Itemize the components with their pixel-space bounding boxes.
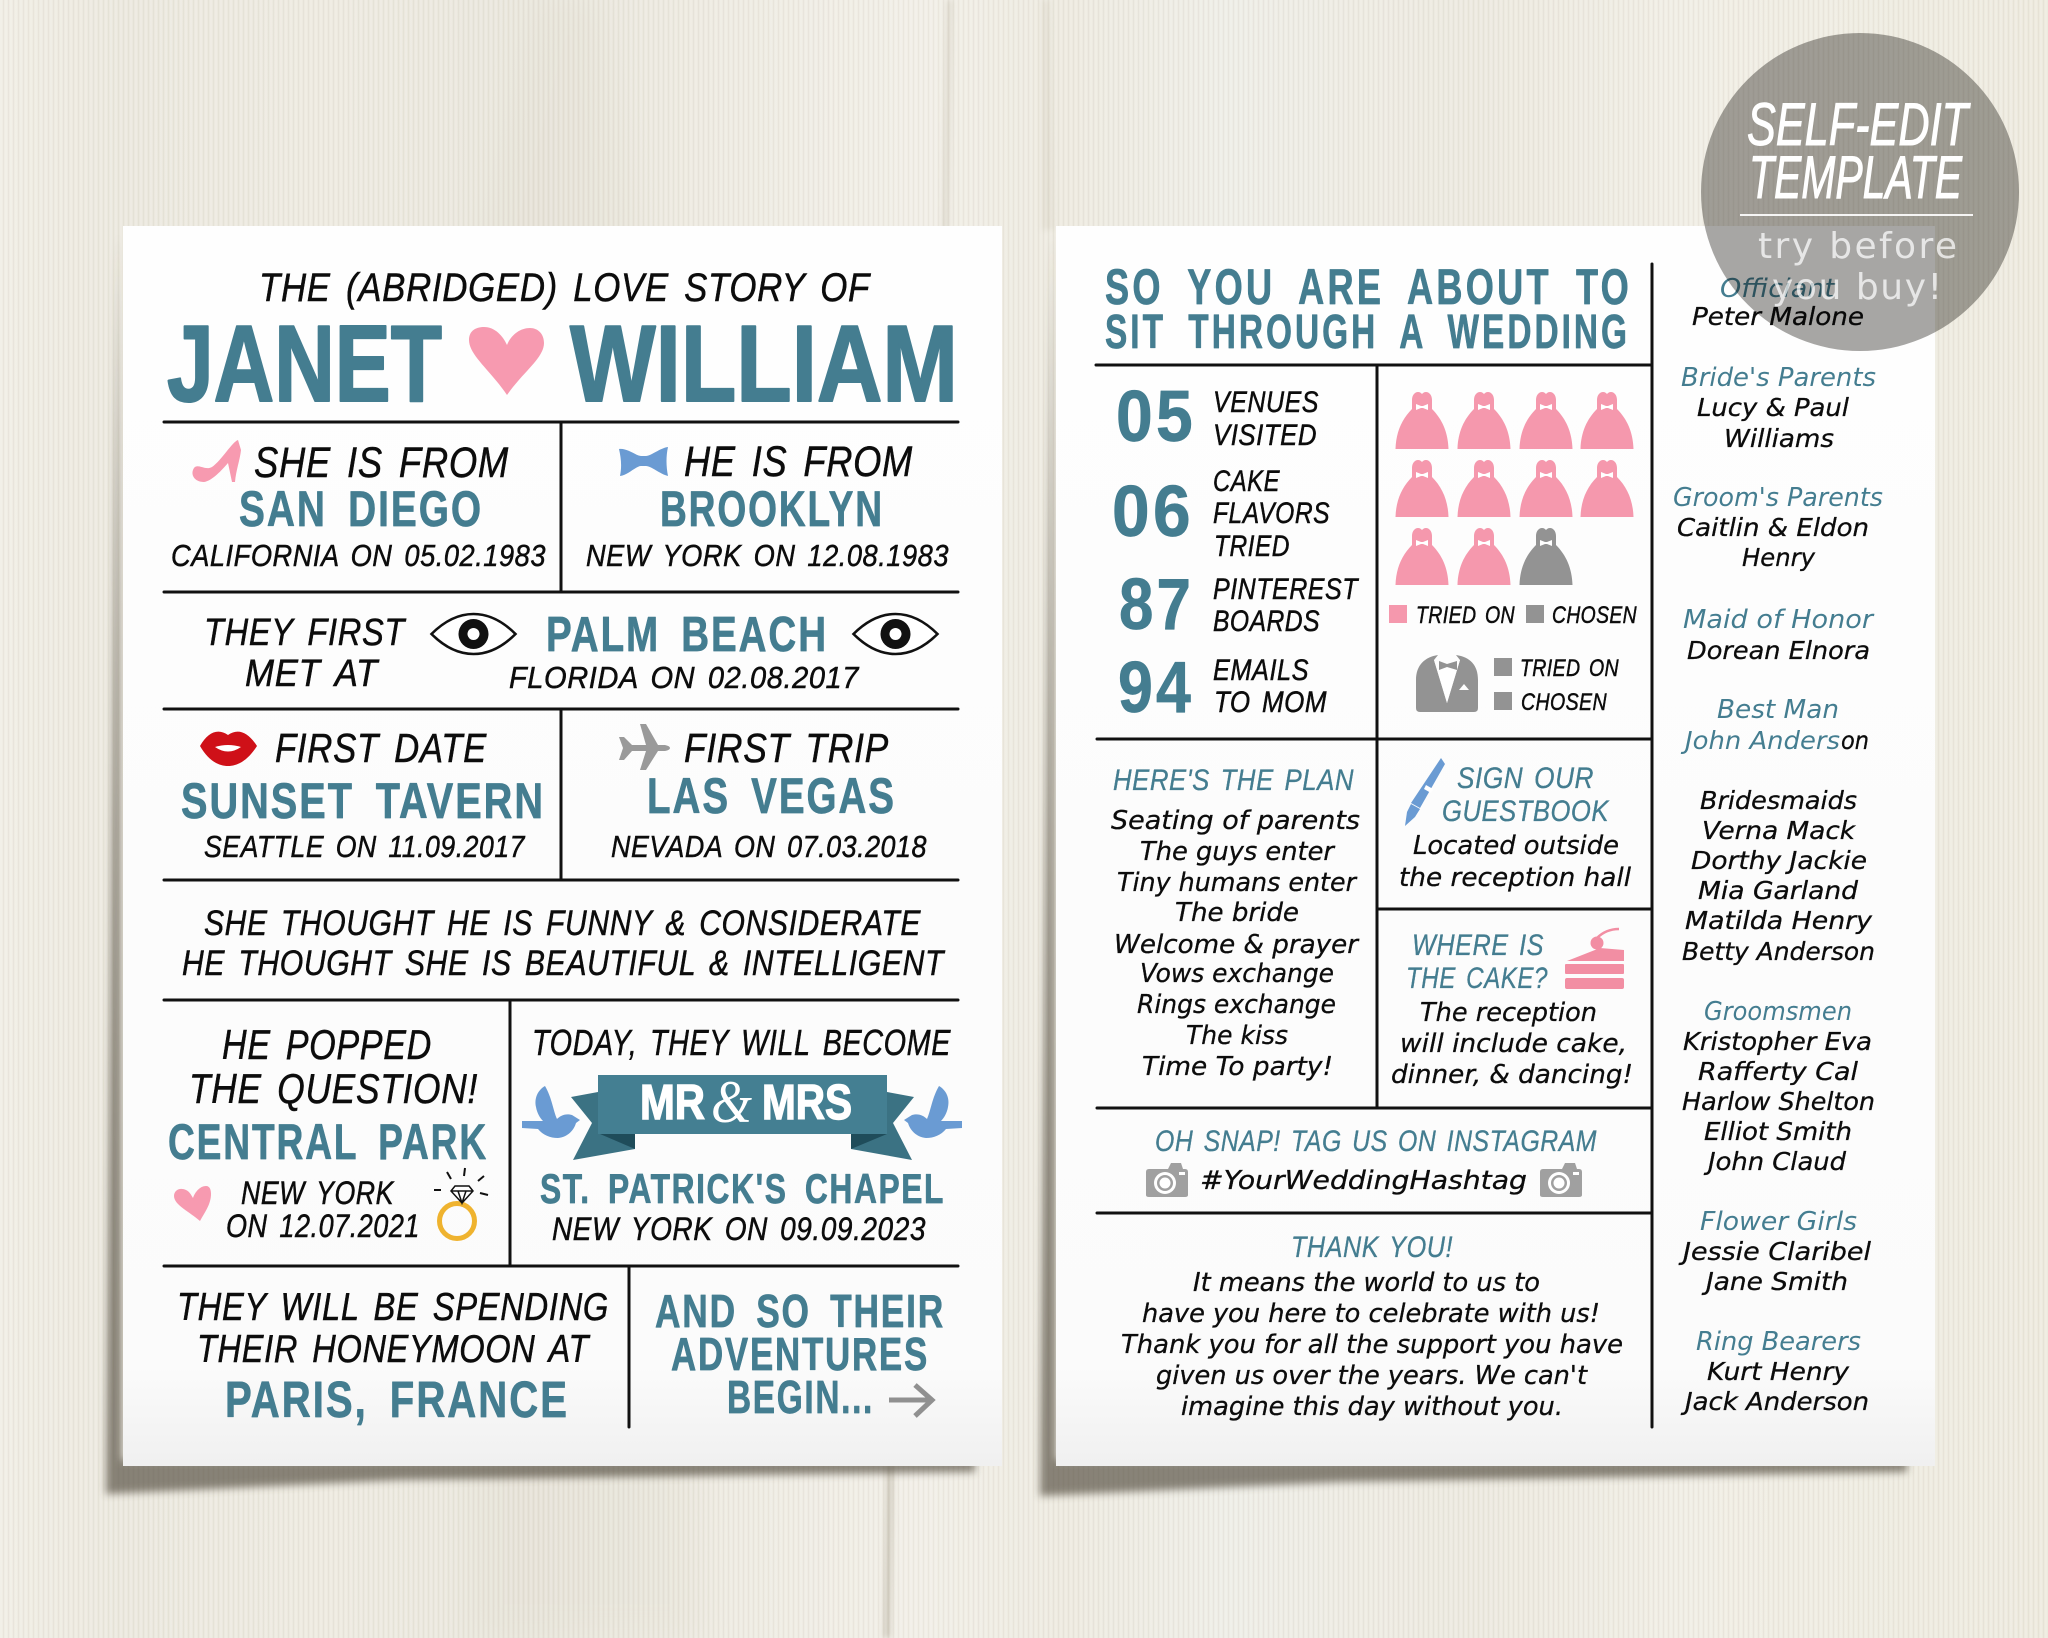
panel: honeymoon: PARIS, FRANCE	[225, 1371, 569, 1428]
panel: thank you: THANK YOU!	[1291, 1231, 1453, 1264]
icon: camera right	[1540, 1163, 1582, 1197]
stat: emails	[1118, 648, 1327, 728]
legend: tuxedo	[1494, 655, 1619, 716]
icon: bow tie	[619, 447, 668, 476]
flower girls: Jessie Claribel	[1678, 1237, 1871, 1266]
heading: SO YOU ARE ABOUT TO	[1105, 259, 1632, 315]
stats: numbers	[1112, 377, 1360, 728]
officiant: Peter Malone	[1692, 302, 1864, 331]
text: proposal date: ON 12.07.2021	[226, 1208, 420, 1244]
icon: high heel	[192, 440, 241, 482]
best man: on	[1841, 726, 1869, 755]
panel: today they become	[522, 1022, 962, 1247]
best man	[1680, 695, 1869, 755]
stat: cake flavors: 06	[1112, 472, 1194, 552]
badge: self-edit template	[1701, 33, 2019, 351]
text: ampersand: &	[711, 1069, 752, 1135]
groomsmen: John Claud	[1703, 1147, 1846, 1176]
panel: where is the cake	[1391, 929, 1633, 1090]
panel: where is the cake: dinner, & dancing!	[1391, 1060, 1633, 1090]
text: San Diego: SAN DIEGO	[239, 481, 483, 537]
text block: what they thought: SHE THOUGHT HE IS FUNNY & CONSIDERATE	[204, 904, 921, 943]
text: California date: CALIFORNIA ON 05.02.1983	[171, 538, 546, 573]
panel: adventures begin: BEGIN...	[727, 1371, 874, 1423]
ring bearers: Jack Anderson	[1680, 1387, 1869, 1416]
text: he is from: HE IS FROM	[684, 438, 913, 486]
groom's parents	[1673, 483, 1883, 572]
text: Seattle date: SEATTLE ON 11.09.2017	[204, 829, 526, 864]
name: Janet: JANET	[167, 303, 442, 425]
card shadows	[106, 230, 1907, 1496]
arrow	[889, 1385, 932, 1416]
stat: emails: TO MOM	[1214, 686, 1327, 719]
title line: THE (ABRIDGED) LOVE STORY OF	[259, 266, 872, 310]
legend: tuxedo: TRIED ON	[1520, 655, 1619, 682]
maid of honor: Dorean Elnora	[1687, 636, 1870, 665]
text: first date: FIRST DATE	[275, 725, 487, 771]
panel: he is from	[586, 438, 949, 573]
card: love story (left)	[123, 226, 1002, 1466]
text: they first: THEY FIRST	[204, 612, 407, 654]
panel: honeymoon: THEIR HONEYMOON AT	[197, 1328, 591, 1371]
text: first trip: FIRST TRIP	[684, 725, 889, 771]
icon: cake slice	[1565, 929, 1624, 989]
icon: tuxedo	[1416, 655, 1478, 712]
panel: honeymoon	[177, 1286, 609, 1428]
panel: here's the plan: Vows exchange	[1140, 959, 1334, 989]
stat: pinterest boards: BOARDS	[1213, 605, 1320, 638]
panel: sign our guestbook: the reception hall	[1399, 863, 1632, 893]
panel: here's the plan: The kiss	[1186, 1021, 1288, 1051]
maid of honor: Maid of Honor	[1683, 605, 1875, 635]
ring bearers: Kurt Henry	[1707, 1357, 1850, 1386]
icon: right dove	[904, 1086, 962, 1138]
icon: small heart	[174, 1186, 211, 1221]
groom's parents: Caitlin & Eldon	[1677, 513, 1869, 542]
stat: emails: EMAILS	[1213, 654, 1309, 687]
icon: diamond ring	[434, 1168, 488, 1238]
panel: where is the cake: WHERE IS	[1412, 929, 1544, 962]
panel: sign our guestbook: SIGN OUR	[1457, 762, 1594, 795]
panel: the proposal	[168, 1021, 488, 1244]
pictogram chart: dresses	[1396, 392, 1634, 585]
card: wedding program (right)	[1056, 226, 1935, 1466]
panel: here's the plan: Rings exchange	[1137, 990, 1336, 1020]
officiant: Officiant	[1720, 274, 1836, 304]
stat: venues: VENUES	[1213, 386, 1319, 419]
icon: left dove	[522, 1086, 580, 1138]
panel: here's the plan: Time To party!	[1142, 1052, 1333, 1082]
panel: where is the cake: will include cake,	[1400, 1029, 1627, 1059]
text: Mrs: MRS	[762, 1076, 852, 1130]
stat: pinterest boards: PINTEREST	[1213, 573, 1360, 606]
bridesmaids: Verna Mack	[1702, 816, 1857, 845]
bride's parents	[1681, 363, 1876, 453]
legend: dresses	[1389, 602, 1637, 629]
text: Brooklyn: BROOKLYN	[660, 481, 884, 537]
heading: SIT THROUGH A WEDDING	[1105, 306, 1630, 359]
bride's parents: Bride's Parents	[1681, 363, 1876, 393]
stat: cake flavors	[1112, 465, 1330, 563]
panel: thank you: imagine this day without you.	[1181, 1392, 1563, 1422]
icon: left eye	[432, 614, 516, 654]
text: he popped: HE POPPED	[222, 1021, 432, 1068]
panel: adventures begin: ADVENTURES	[671, 1328, 929, 1380]
stat: pinterest boards	[1119, 565, 1360, 645]
bridesmaids: Mia Garland	[1698, 876, 1858, 905]
panel: instagram	[1146, 1125, 1597, 1197]
icon: fountain pen	[1405, 758, 1445, 826]
panel: first date	[181, 725, 545, 864]
panel: sign our guestbook	[1399, 758, 1632, 893]
icon: right eye	[854, 614, 938, 654]
stat: cake flavors: CAKE	[1213, 465, 1280, 498]
panel: here's the plan: The guys enter	[1140, 837, 1336, 867]
sidebar: wedding party	[1673, 274, 1883, 1416]
text: Nevada date: NEVADA ON 07.03.2018	[611, 829, 927, 864]
flower girls: Jane Smith	[1701, 1267, 1848, 1296]
panel: thank you: have you here to celebrate with us!	[1142, 1299, 1600, 1329]
panel: where is the cake: The reception	[1420, 998, 1597, 1028]
panel: sign our guestbook: Located outside	[1413, 831, 1619, 861]
panel: instagram: #YourWeddingHashtag	[1200, 1166, 1527, 1196]
icon: airplane	[619, 724, 670, 770]
bridesmaids	[1682, 786, 1875, 966]
officiant	[1692, 274, 1864, 331]
panel: sign our guestbook: GUESTBOOK	[1442, 795, 1610, 828]
bride's parents: Williams	[1724, 424, 1834, 453]
groomsmen: Groomsmen	[1704, 997, 1852, 1027]
panel: she is from	[171, 439, 546, 573]
groomsmen: Rafferty Cal	[1698, 1057, 1858, 1086]
text: met at: MET AT	[245, 653, 380, 695]
groomsmen	[1682, 997, 1875, 1176]
right card dividers	[1096, 264, 1652, 1427]
panel: thank you	[1121, 1231, 1623, 1422]
badge: self-edit template: you buy!	[1772, 267, 1942, 308]
best man: Best Man	[1717, 695, 1839, 725]
badge: self-edit template: SELF-EDIT	[1747, 91, 1971, 158]
maid of honor	[1683, 605, 1875, 665]
bridesmaids: Dorthy Jackie	[1691, 846, 1867, 875]
text: she is from: SHE IS FROM	[254, 439, 509, 487]
groomsmen: Harlow Shelton	[1682, 1087, 1875, 1116]
groom's parents: Henry	[1742, 543, 1816, 572]
panel: instagram: OH SNAP! TAG US ON INSTAGRAM	[1155, 1125, 1597, 1158]
flower girls	[1678, 1207, 1871, 1296]
left card dividers	[164, 422, 958, 1427]
text: Mr: MR	[640, 1076, 705, 1130]
groomsmen: Kristopher Eva	[1683, 1027, 1872, 1056]
heading	[1105, 259, 1632, 359]
ring bearers: Ring Bearers	[1696, 1327, 1861, 1357]
bride's parents: Lucy & Paul	[1697, 393, 1849, 422]
legend: dresses: TRIED ON	[1416, 602, 1515, 629]
groom's parents: Groom's Parents	[1673, 483, 1883, 513]
panel: they first met	[204, 608, 938, 695]
text: today: TODAY, THEY WILL BECOME	[532, 1022, 951, 1063]
stat: cake flavors: FLAVORS	[1213, 497, 1330, 530]
stat: pinterest boards: 87	[1119, 565, 1194, 645]
text: New York: NEW YORK	[241, 1175, 395, 1211]
icon: heart	[469, 327, 544, 395]
text block: what they thought: HE THOUGHT SHE IS BEAUTIFUL & INTELLIGENT	[182, 944, 946, 983]
text block: what they thought	[182, 904, 946, 983]
legend: dresses: CHOSEN	[1552, 602, 1637, 629]
panel: here's the plan	[1111, 764, 1360, 1082]
bridesmaids: Matilda Henry	[1685, 906, 1873, 935]
panel: here's the plan: HERE'S THE PLAN	[1113, 764, 1354, 797]
ring bearers	[1680, 1327, 1869, 1416]
panel: here's the plan: Welcome & prayer	[1114, 930, 1360, 960]
flower girls: Flower Girls	[1700, 1207, 1857, 1237]
text: Las Vegas: LAS VEGAS	[647, 768, 896, 824]
badge: self-edit template: try before	[1758, 226, 1957, 267]
panel: here's the plan: The bride	[1175, 898, 1299, 928]
panel: thank you: given us over the years. We can't	[1156, 1361, 1588, 1391]
panel: where is the cake: THE CAKE?	[1406, 962, 1548, 995]
stat: cake flavors: TRIED	[1214, 530, 1290, 563]
panel: here's the plan: Tiny humans enter	[1117, 868, 1358, 898]
name: William: WILLIAM	[570, 303, 958, 425]
stat: venues	[1116, 377, 1319, 457]
text: St Patrick's Chapel: ST. PATRICK'S CHAPEL	[540, 1165, 945, 1212]
groomsmen: Elliot Smith	[1704, 1117, 1852, 1146]
panel: adventures begin	[655, 1285, 945, 1423]
icon: lips	[200, 732, 257, 766]
text: Palm Beach: PALM BEACH	[546, 608, 828, 662]
best man: John Anders	[1680, 726, 1840, 755]
panel: here's the plan: Seating of parents	[1111, 806, 1360, 836]
text: wedding date: NEW YORK ON 09.09.2023	[552, 1211, 926, 1247]
text: the question: THE QUESTION!	[189, 1065, 478, 1112]
ribbon banner	[571, 1069, 914, 1160]
text: Florida date: FLORIDA ON 02.08.2017	[509, 660, 860, 695]
text: Sunset Tavern: SUNSET TAVERN	[181, 773, 545, 829]
legend: tuxedo: CHOSEN	[1521, 689, 1607, 716]
bridesmaids: Betty Anderson	[1682, 937, 1875, 966]
panel: thank you: It means the world to us to	[1193, 1268, 1540, 1298]
panel: adventures begin: AND SO THEIR	[655, 1285, 945, 1337]
stat: venues: VISITED	[1213, 419, 1317, 452]
text: Central Park: CENTRAL PARK	[168, 1114, 488, 1170]
stat: emails: 94	[1118, 648, 1194, 728]
stat: venues: 05	[1116, 377, 1196, 457]
bridesmaids: Bridesmaids	[1700, 786, 1857, 815]
icon: camera left	[1146, 1163, 1188, 1197]
panel: honeymoon: THEY WILL BE SPENDING	[177, 1286, 609, 1329]
text: New York date: NEW YORK ON 12.08.1983	[586, 538, 949, 573]
panel: first trip	[611, 724, 927, 864]
panel: thank you: Thank you for all the support you have	[1121, 1330, 1623, 1360]
